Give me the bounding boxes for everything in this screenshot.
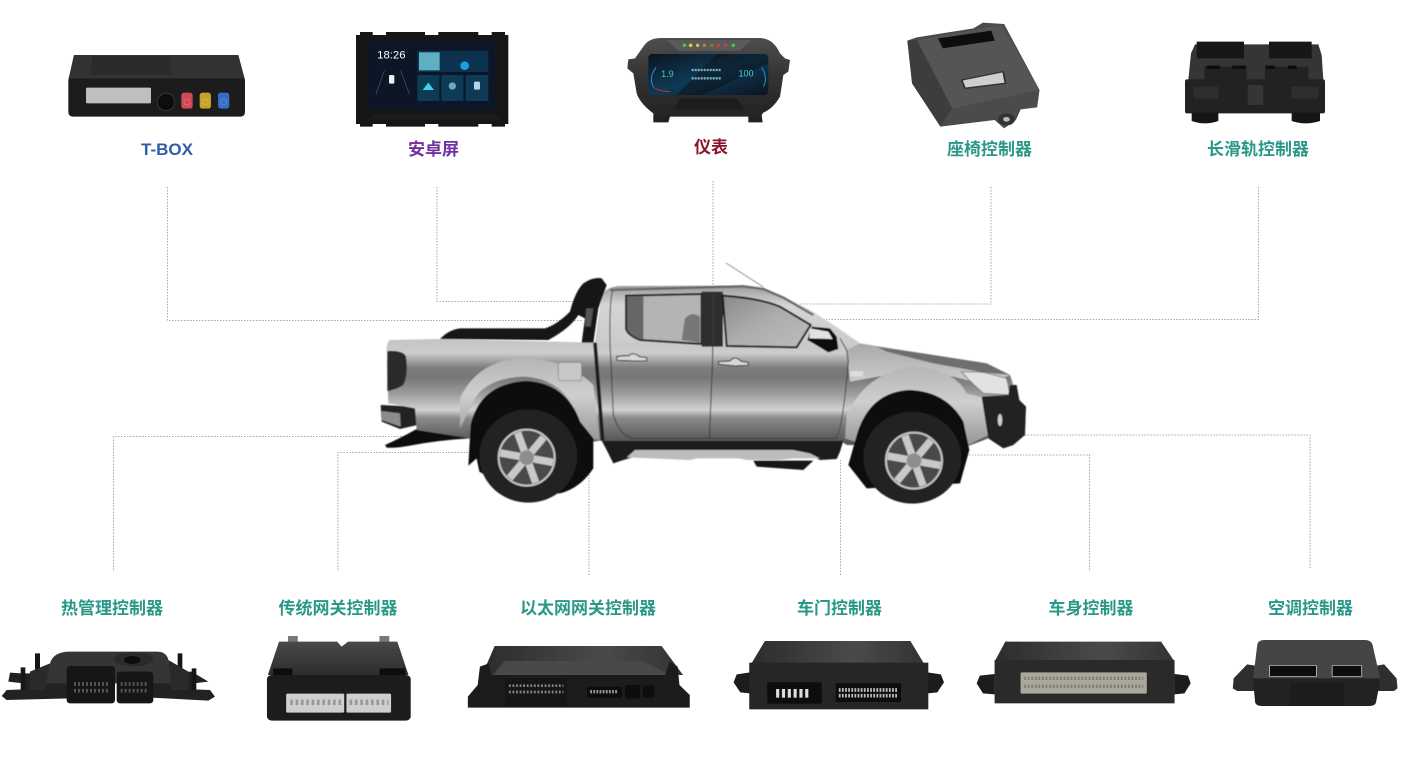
rail feet (1192, 112, 1320, 123)
T-BOX white connector (86, 88, 151, 103)
T-BOX coax ports (181, 93, 229, 109)
indicator plate (667, 40, 752, 51)
rear wheel (479, 409, 577, 503)
rail main body (1185, 79, 1325, 113)
door handles (617, 354, 748, 366)
rear fender flare (460, 358, 600, 440)
rear window (626, 294, 702, 344)
truck body (387, 286, 1018, 447)
traditional gateway controller module (267, 636, 411, 721)
seat bracket (998, 113, 1015, 125)
mirror (807, 327, 838, 352)
front wheel (863, 412, 961, 504)
headlight (962, 372, 1010, 395)
thermal housing (43, 652, 173, 683)
bottom controls (368, 113, 500, 119)
door connectors (767, 682, 822, 704)
ethernet gateway controller module (468, 646, 690, 708)
app tiles (417, 75, 488, 101)
label: long slide rail controller: 长滑轨控制器 (1207, 139, 1309, 159)
cabin upper (597, 286, 860, 350)
android screen module (356, 32, 508, 127)
hood (847, 343, 1010, 385)
air conditioning controller module (1233, 640, 1398, 706)
connector lines (114, 181, 1310, 575)
cluster display (648, 54, 768, 95)
ethernet ports (505, 678, 567, 706)
long slide rail controller module (1185, 42, 1325, 123)
body beige connector (1021, 672, 1147, 694)
seat connector (938, 31, 995, 48)
side step (627, 450, 820, 460)
label: T-BOX: T-BOX (141, 140, 194, 159)
front bumper and grille (982, 385, 1026, 448)
seat controller module (907, 23, 1040, 128)
AC mounting ears (1233, 664, 1398, 691)
screen display (368, 42, 495, 110)
T-BOX module (68, 55, 245, 117)
sill (602, 441, 843, 463)
front wheel arch (848, 390, 969, 488)
rear bumper (381, 405, 417, 429)
label: instrument cluster: 仪表 (694, 138, 728, 157)
front fender flare (845, 367, 988, 445)
thermal posts (21, 653, 196, 690)
AC ports (1269, 666, 1316, 676)
door mounting ears (734, 672, 944, 693)
rail connectors (1197, 42, 1312, 58)
roof rail (610, 286, 813, 315)
instrument cluster module: 100 (738, 68, 753, 78)
rear window shade (627, 297, 643, 339)
cluster lower buttons (674, 98, 744, 109)
door lines (610, 290, 848, 438)
label: air conditioning controller: 空调控制器 (1268, 598, 1353, 618)
rear step (385, 429, 470, 448)
android screen module: 18:26 (377, 50, 406, 62)
car diagram (376, 71, 409, 94)
instrument cluster module (627, 38, 790, 122)
side repeater (850, 371, 863, 377)
label: door controller: 车门控制器 (797, 598, 882, 618)
T-BOX round port (157, 93, 175, 111)
indicator lights (683, 44, 735, 47)
door controller module (734, 641, 944, 709)
thermal connectors (67, 666, 115, 703)
label: ethernet gateway controller: 以太网网关控制器 (520, 599, 656, 618)
rear wheel arch (468, 381, 593, 493)
gateway white connectors (286, 694, 344, 713)
seat silhouette (682, 314, 700, 343)
media card (417, 51, 488, 72)
body controller module (977, 642, 1191, 703)
front window (723, 296, 811, 347)
label: thermal management controller: 热管理控制器 (61, 598, 163, 618)
antenna (726, 263, 763, 287)
label: body controller: 车身控制器 (1048, 598, 1134, 618)
bed and cab gap (595, 343, 603, 441)
body mounting ears (977, 674, 1191, 694)
seat white plug (962, 72, 1006, 88)
label: android screen: 安卓屏 (408, 140, 459, 159)
tail light (387, 351, 407, 391)
label: traditional gateway controller: 传统网关控制器 (278, 598, 398, 618)
roll bar (440, 278, 607, 343)
pickup truck (381, 263, 1026, 504)
door pillar (702, 292, 723, 347)
thermal management controller module (2, 652, 215, 703)
fuel cap (558, 362, 582, 381)
label: seat controller: 座椅控制器 (947, 139, 1032, 159)
instrument cluster module: 1.9 (661, 69, 674, 79)
